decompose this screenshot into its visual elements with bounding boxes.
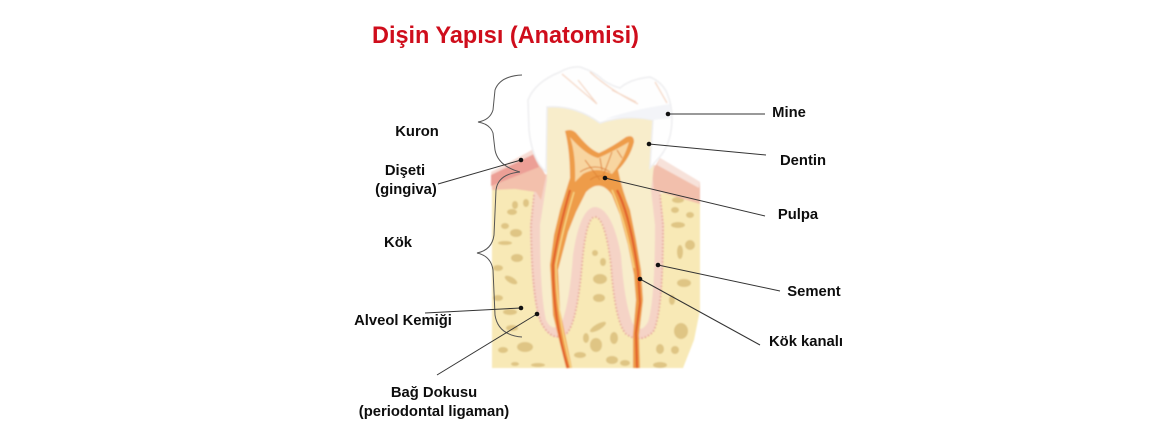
tooth dentin [540, 107, 655, 329]
right gum [652, 158, 700, 204]
label: dentin: Dentin [780, 153, 826, 169]
periodontal ligament and cementum [530, 165, 664, 339]
bone speckles [493, 197, 695, 368]
pointer: connective tissue [437, 312, 539, 375]
label: connective tissue: (periodontal ligaman) [359, 404, 509, 420]
label: connective tissue: Bağ Dokusu [391, 385, 477, 401]
label: root: Kök [384, 235, 413, 251]
pointer: dentin [647, 142, 766, 155]
pointer: gingiva [438, 158, 523, 184]
label: gingiva: (gingiva) [375, 182, 437, 198]
alveolar bone [492, 185, 700, 368]
label: gingiva [375, 163, 437, 198]
bracket: crown [478, 75, 522, 172]
pulp and root canals [550, 130, 643, 368]
label: crown: Kuron [395, 124, 439, 140]
label: connective tissue [359, 385, 509, 420]
bracket: root [477, 172, 522, 337]
label: enamel: Mine [772, 105, 806, 121]
pointer: root canal [638, 277, 760, 345]
label: gingiva: Dişeti [385, 163, 425, 179]
pointer: cementum [656, 263, 780, 291]
label: root canal: Kök kanalı [769, 334, 843, 350]
pulp chamber detail [570, 137, 629, 182]
canal inner lines [553, 190, 640, 368]
pointer: enamel [666, 112, 765, 116]
title: Dişin Yapısı (Anatomisi) [372, 22, 639, 49]
left gum [491, 150, 546, 200]
pointer: alveolar bone [425, 306, 523, 313]
tooth illustration [491, 67, 700, 368]
pointer: pulp [603, 176, 765, 216]
label: pulp: Pulpa [778, 207, 819, 223]
label: alveolar bone: Alveol Kemiği [354, 313, 452, 329]
enamel crown [528, 67, 672, 172]
label: cementum: Sement [787, 284, 841, 300]
